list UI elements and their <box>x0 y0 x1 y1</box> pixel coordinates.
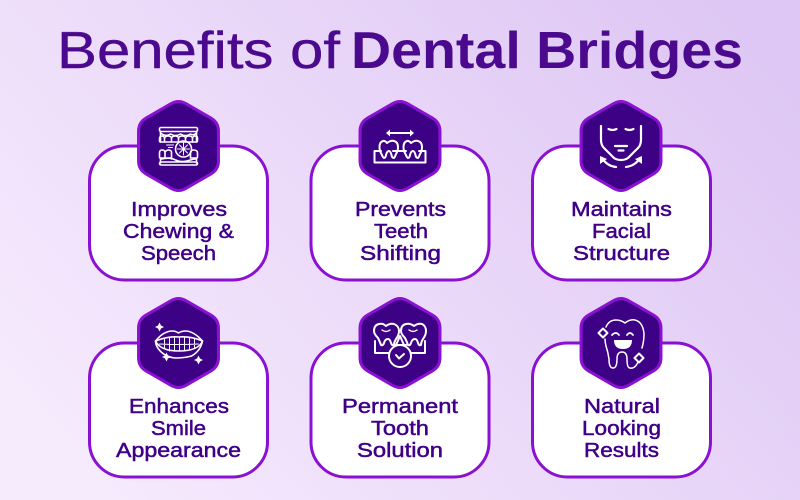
label: natural looking results: Looking <box>582 417 661 440</box>
label: natural looking results: Natural <box>584 395 660 418</box>
label: maintains facial structure: Structure <box>573 242 670 265</box>
label: prevents teeth shifting: Prevents <box>355 198 446 221</box>
icon: smiling tooth with sparkles in hexagon <box>581 299 661 387</box>
label: prevents teeth shifting: Teeth <box>374 220 428 243</box>
label: prevents teeth shifting <box>355 198 446 265</box>
label: improves chewing and speech: Improves <box>131 198 227 221</box>
label: prevents teeth shifting: Shifting <box>360 242 441 265</box>
label: permanent tooth solution: Permanent <box>342 395 458 418</box>
icon: smiling lips with sparkles in hexagon <box>139 299 218 387</box>
label: permanent tooth solution: Solution <box>357 439 443 462</box>
label: enhances smile appearance: Appearance <box>116 439 241 462</box>
panel: improves chewing and speech <box>90 102 268 280</box>
icon: teeth with spacing arrow in hexagon <box>360 102 440 190</box>
label: improves chewing and speech <box>123 198 234 265</box>
label: natural looking results: Results <box>584 439 659 462</box>
label: permanent tooth solution: Tooth <box>371 417 429 440</box>
icon: teeth and citrus in hexagon <box>139 102 218 190</box>
label: improves chewing and speech: Chewing & <box>123 220 234 243</box>
panel: natural looking results <box>532 299 710 477</box>
label: enhances smile appearance: Smile <box>151 417 206 440</box>
panel: enhances smile appearance <box>90 299 268 477</box>
title: Dental Bridges <box>351 22 743 80</box>
panel: permanent tooth solution <box>311 299 489 477</box>
label: maintains facial structure: Facial <box>592 220 651 243</box>
label: permanent tooth solution <box>342 395 458 462</box>
icon: face with jawline arrows in hexagon <box>581 102 661 190</box>
title <box>57 22 743 80</box>
label: improves chewing and speech: Speech <box>141 242 216 265</box>
icon: teeth with implant check badge in hexagon <box>360 299 440 387</box>
panel: prevents teeth shifting <box>311 102 489 280</box>
panel: maintains facial structure <box>532 102 710 280</box>
label: natural looking results <box>582 395 661 462</box>
label: enhances smile appearance: Enhances <box>129 395 229 418</box>
label: maintains facial structure: Maintains <box>571 198 672 221</box>
label: enhances smile appearance <box>116 395 241 462</box>
label: maintains facial structure <box>571 198 672 265</box>
title: Benefits of <box>57 22 341 80</box>
